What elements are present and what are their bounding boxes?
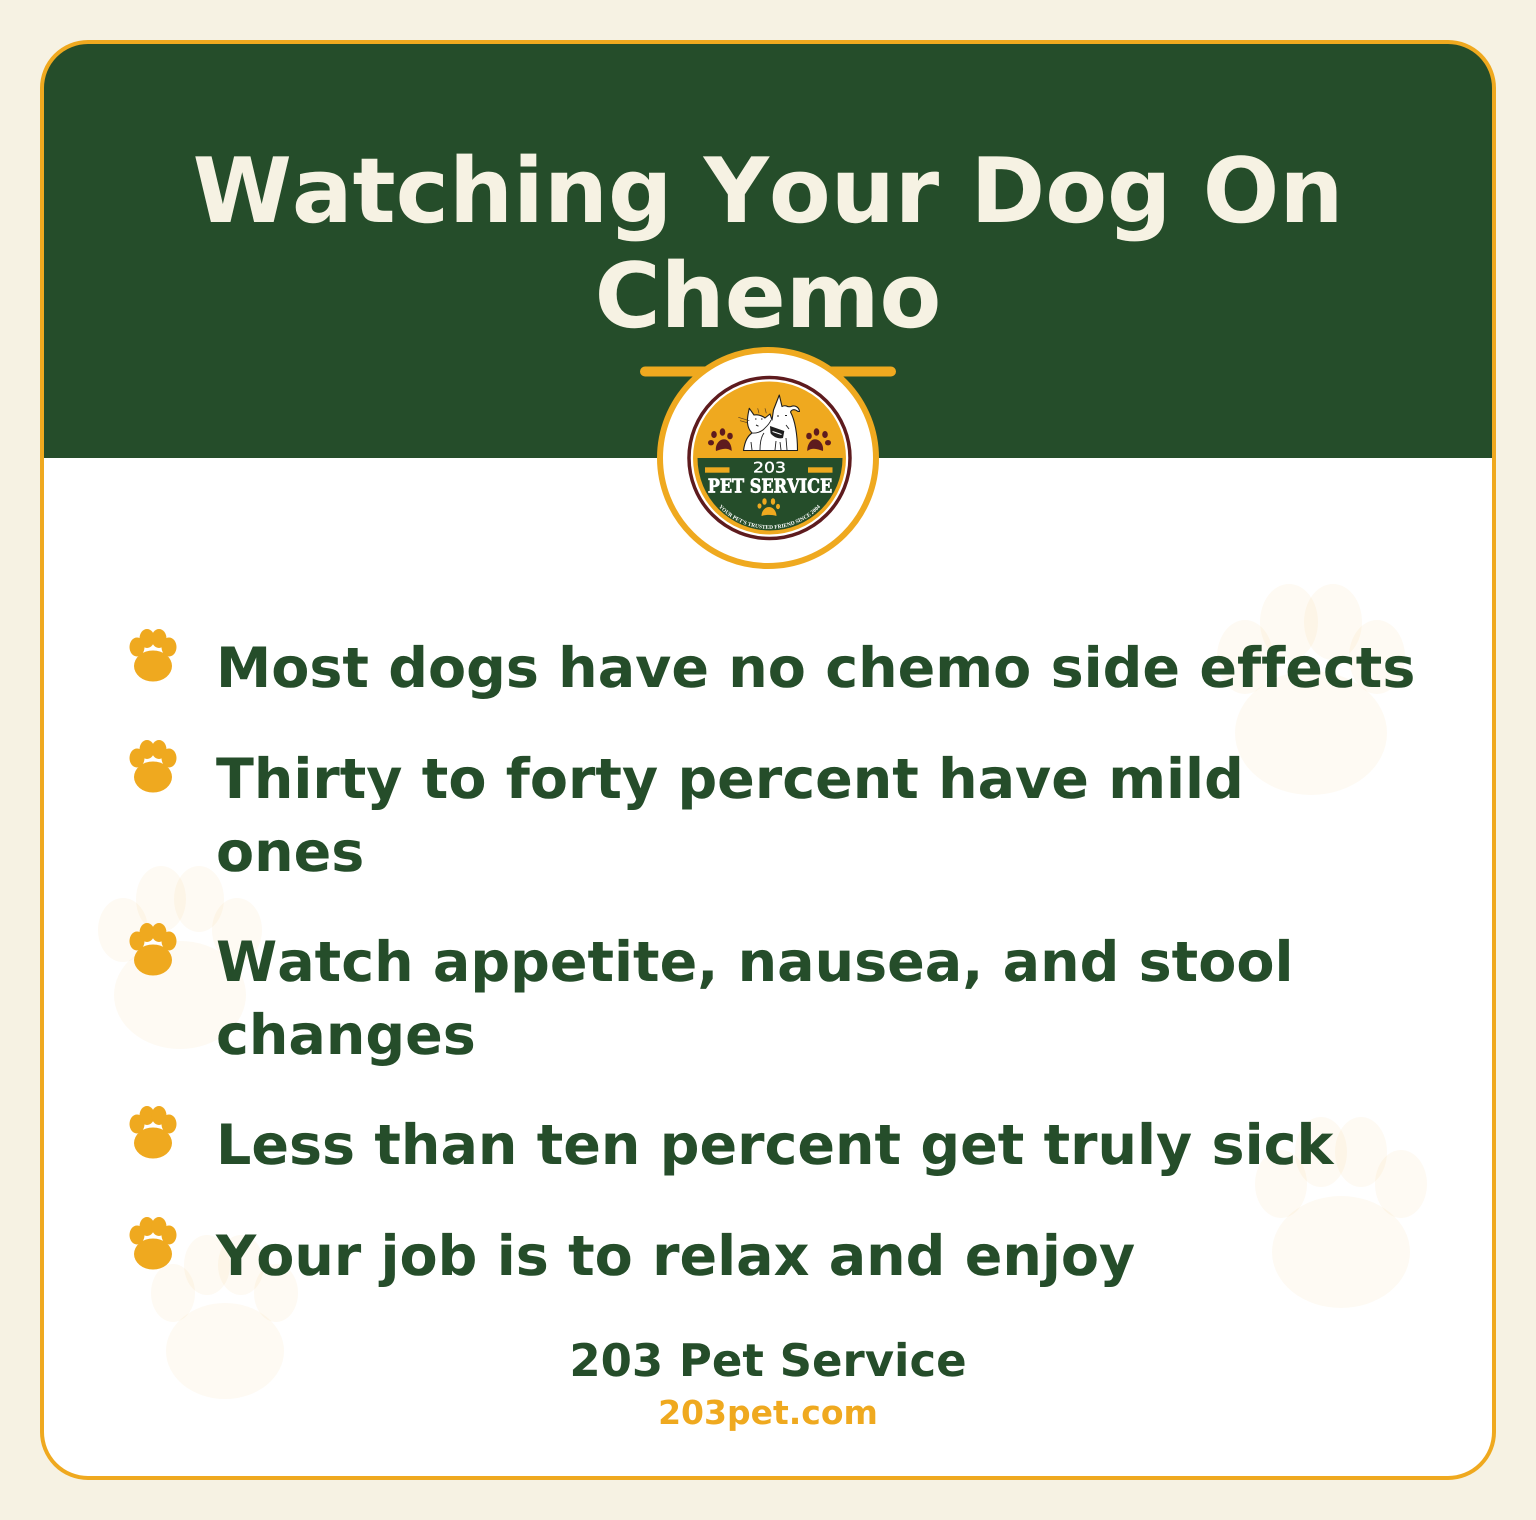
title underline [640,366,896,376]
bullet list [130,629,1415,1289]
whiskers and stripes [738,408,766,423]
logo green band [698,458,842,530]
badge ring [660,350,876,566]
icon: paw bullet [130,923,176,976]
footer website: 203pet.com [658,1393,878,1432]
silhouette [744,395,800,450]
icon: left logo paw [708,428,733,451]
title: Chemo [595,244,941,349]
icon: right logo paw [806,428,831,451]
icon: cat and dog [738,395,800,450]
icon: paw bullet [130,629,176,682]
icon: logo bottom paw [758,498,780,516]
logo maroon ring [689,378,850,538]
bullet 4: Less than ten percent get truly sick [216,1113,1334,1178]
bullet 2: ones [216,820,364,885]
watermark paw: middle left [98,866,262,1049]
bullet 2: Thirty to forty percent have mild [216,747,1244,812]
bullet 5: Your job is to relax and enjoy [215,1224,1135,1289]
watermark paw: top right [1217,584,1405,795]
title [193,139,1343,349]
watermark paw: bottom right [1255,1117,1427,1308]
icon: paw bullet [130,1106,176,1158]
dog mouth [770,426,784,438]
bullet 1: Most dogs have no chemo side effects [216,636,1415,701]
bullet 3: changes [216,1003,476,1068]
icon: paw bullet [130,740,176,792]
logo text: 203: 203 [753,460,786,476]
watermark paw: bottom left [151,1235,298,1399]
footer brand name: 203 Pet Service [569,1334,967,1387]
icon: paw bullet [130,1217,176,1270]
logo arc tagline: YOUR PET'S TRUSTED FRIEND SINCE 2004 [719,504,820,529]
logo bars [705,467,832,473]
faces [755,416,787,426]
logo gold disc [693,382,846,534]
bullet 3: Watch appetite, nausea, and stool [216,930,1293,995]
logo text: pet service: PET SERVICE [708,475,832,497]
title: Watching Your Dog On [193,139,1343,244]
bullet 2 [130,740,1244,885]
cat and dog inner lines [751,420,789,450]
bullet 3 [130,923,1293,1068]
logo badge [657,347,879,569]
